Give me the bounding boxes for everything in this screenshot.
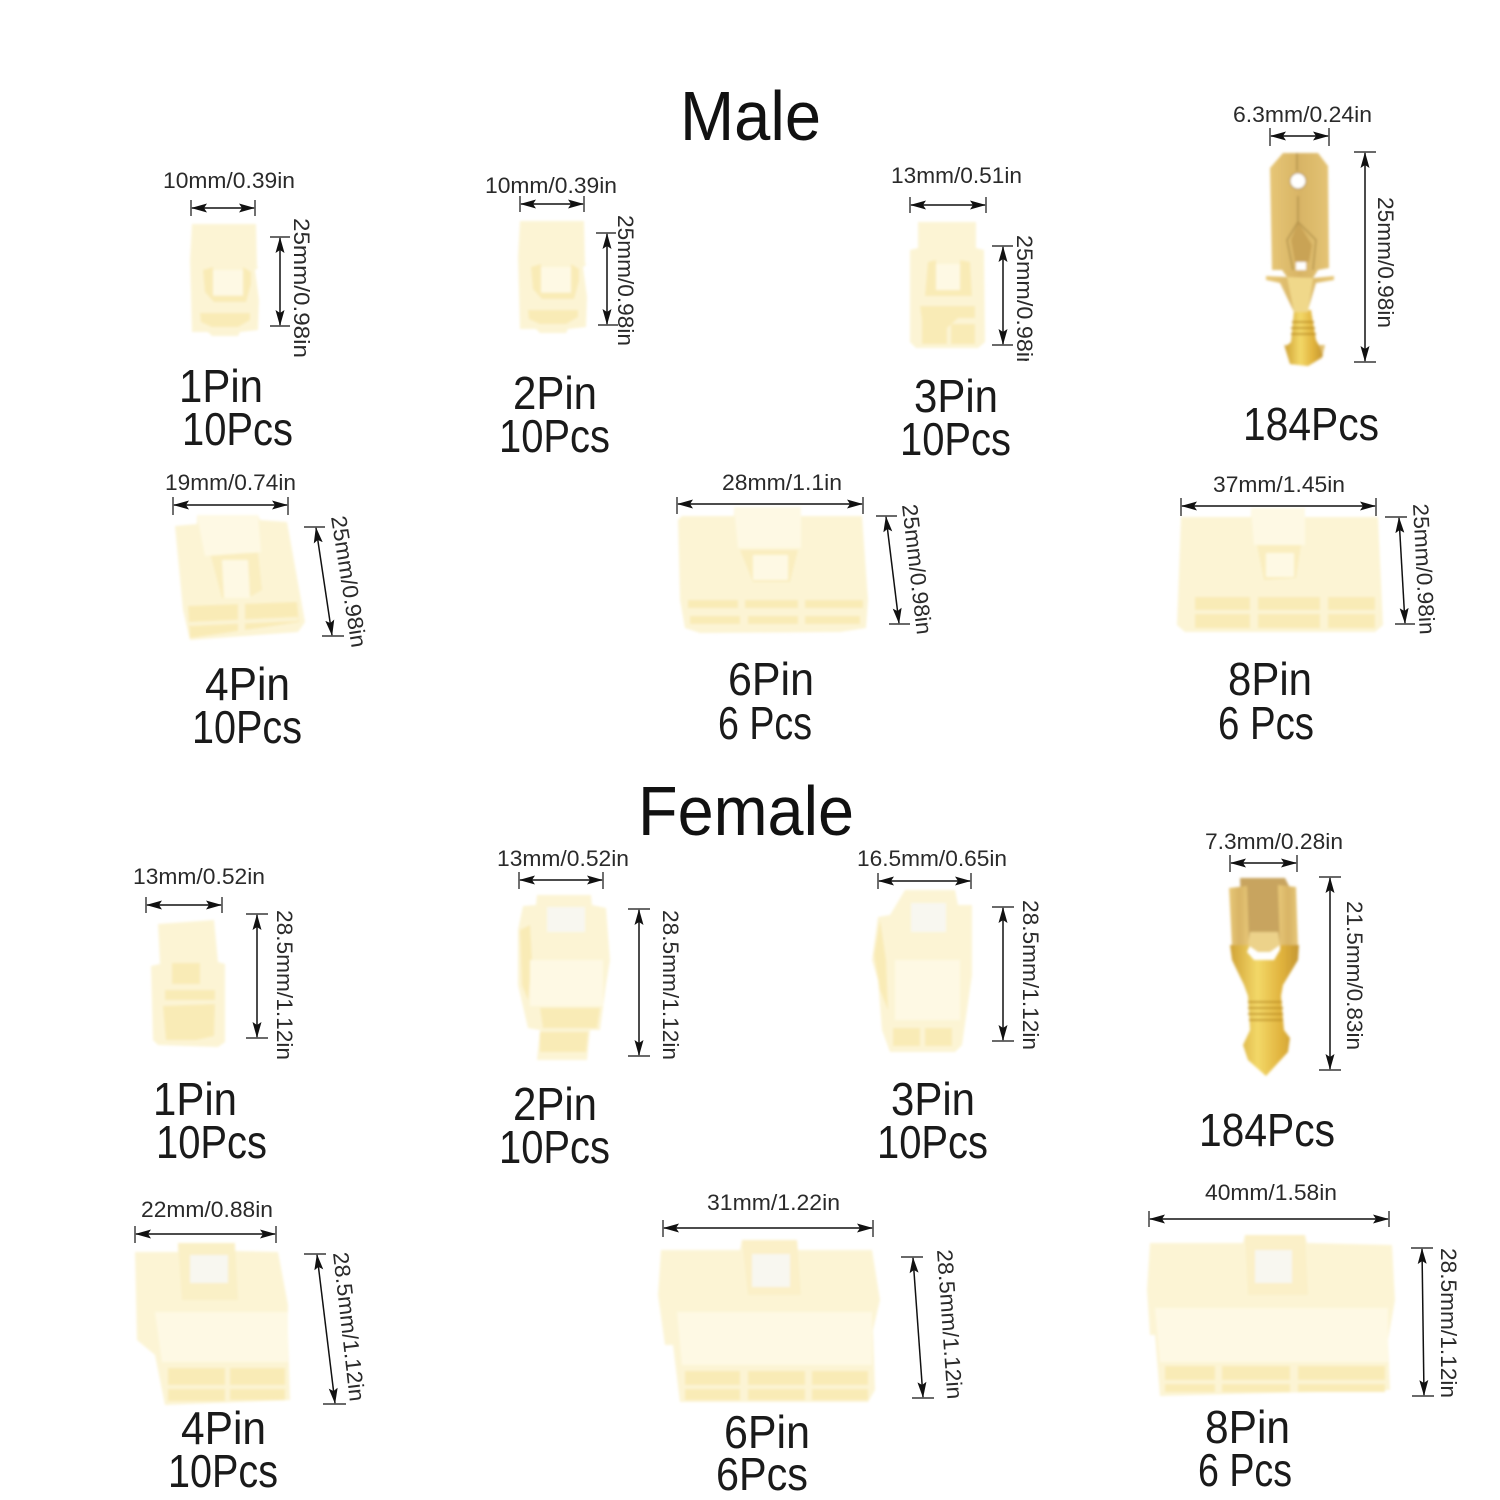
panel: male 2 pin [485,173,638,462]
label: 8Pin 6Pcs: 8Pin [1228,653,1312,705]
dimension: height 21.5mm [1319,877,1367,1070]
label: 1Pin 10Pcs: 1Pin [179,360,263,412]
dimension: width 13mm: 13mm/0.52in [133,864,265,889]
panel: male 6 pin [677,470,937,749]
connector: male 1 pin [190,224,259,336]
label: 6Pin 6Pcs: 6Pin [728,653,814,705]
connector: female 3 pin [872,890,972,1052]
label: 6Pin 6Pcs: 6 Pcs [718,697,812,749]
dimension: height 28.5mm [246,910,297,1060]
label: 4Pin 10Pcs: 10Pcs [192,701,302,753]
label: 3Pin 10Pcs: 10Pcs [877,1116,988,1168]
dimension: height 25mm [876,503,937,636]
dimension: height 25mm: 25mm/0.98in [897,503,937,636]
panel: male 1 pin [163,168,314,455]
label: 8Pin 6Pcs: 6 Pcs [1198,1444,1292,1496]
dimension: height 25mm [596,215,638,346]
label: 3Pin 10Pcs: 10Pcs [900,413,1011,465]
label: 4Pin 10Pcs: 4Pin [181,1402,266,1454]
connector: female 2 pin [518,895,610,1060]
dimension: width 10mm: 10mm/0.39in [163,168,295,193]
icon: male brass terminal [1266,153,1334,366]
connector: male 2 pin [518,221,587,333]
dimension: height 25mm [270,219,310,356]
dimension: height 25mm: 25mm/0.98in [1373,197,1398,328]
label: 2Pin 10Pcs [499,367,610,462]
connector: female 4 pin [135,1243,290,1405]
label: 6Pin 6Pcs [716,1406,810,1500]
connector: male 3 pin [910,222,985,348]
dimension: height 25mm [992,236,1033,361]
dimension: height 25mm: 25mm/0.98in [1012,235,1037,370]
dimension: width 7.3mm [1205,829,1343,872]
dimension: width 13mm [497,846,629,889]
label: 6Pin 6Pcs: 6Pcs [716,1448,808,1500]
panel: female 3 pin [857,846,1043,1168]
dimension: height 28.5mm [1411,1248,1461,1398]
connector: female 1 pin [151,920,225,1047]
label: 4Pin 10Pcs [168,1402,278,1497]
heading: Male: Male [680,77,821,155]
dimension: width 31mm: 31mm/1.22in [707,1190,840,1215]
dimension: width 37mm: 37mm/1.45in [1213,472,1345,497]
label: 3Pin 10Pcs [900,370,1011,465]
dimension: width 7.3mm: 7.3mm/0.28in [1205,829,1343,854]
label: 2Pin 10Pcs: 2Pin [513,1078,597,1130]
dimension: height 28.5mm [992,900,1043,1050]
label: 6Pin 6Pcs: 6Pin [724,1406,810,1458]
dimension: width 16.5mm: 16.5mm/0.65in [857,846,1007,871]
label: 1Pin 10Pcs: 10Pcs [182,403,293,455]
label: 1Pin 10Pcs [153,1073,267,1168]
dimension: height 25mm [1385,503,1440,635]
label: 3Pin 10Pcs [877,1073,988,1168]
panel: female 1 pin [133,864,297,1168]
dimension: width 6.3mm: 6.3mm/0.24in [1233,102,1372,127]
label: 6Pin 6Pcs [718,653,814,749]
panel: female 6 pin [658,1190,967,1500]
heading: Female: Female [638,772,854,850]
label: 2Pin 10Pcs: 10Pcs [499,410,610,462]
dimension: width 13mm [133,864,265,913]
panel: female 8 pin [1147,1180,1461,1496]
connector: male 8 pin [1177,508,1383,632]
label: 4Pin 10Pcs: 4Pin [205,658,290,710]
dimension: width 31mm [663,1190,873,1237]
label: 184Pcs: 184Pcs [1243,398,1379,450]
label: 8Pin 6Pcs [1198,1401,1292,1496]
dimension: height 25mm: 25mm/0.98in [1408,503,1440,635]
panel: male 3 pin [891,163,1037,465]
panel: male terminal [1233,102,1398,450]
connector: female 8 pin [1147,1235,1395,1396]
dimension: height 28.5mm: 28.5mm/1.12in [328,1251,370,1403]
dimension: height 25mm: 25mm/0.98in [289,218,314,358]
dimension: height 28.5mm: 28.5mm/1.12in [932,1249,967,1400]
dimension: width 13mm [891,163,1022,213]
panel: female 2 pin [497,846,683,1173]
dimension: width 40mm: 40mm/1.58in [1205,1180,1337,1205]
dimension: width 40mm [1149,1180,1389,1227]
label: 8Pin 6Pcs: 6 Pcs [1218,697,1314,749]
dimension: width 28mm [677,470,863,514]
panel: female terminal [1199,829,1367,1156]
dimension: height 28.5mm [901,1249,967,1400]
dimension: height 28.5mm: 28.5mm/1.12in [1018,900,1043,1050]
label: 1Pin 10Pcs: 10Pcs [156,1116,267,1168]
panel: male 4 pin [165,470,372,753]
label: 3Pin 10Pcs: 3Pin [891,1073,975,1125]
label: 4Pin 10Pcs [192,658,302,753]
dimension: width 19mm [165,470,296,515]
dimension: height 28.5mm [304,1251,370,1404]
label: 2Pin 10Pcs [499,1078,610,1173]
dimension: width 16.5mm [857,846,1007,889]
dimension: width 22mm: 22mm/0.88in [141,1197,273,1222]
dimension: height 28.5mm [628,909,683,1060]
dimension: width 22mm [135,1197,276,1243]
label: 2Pin 10Pcs: 10Pcs [499,1121,610,1173]
label: 8Pin 6Pcs [1218,653,1314,749]
label: 1Pin 10Pcs [179,360,293,455]
label: 4Pin 10Pcs: 10Pcs [168,1445,278,1497]
connector: male 6 pin [678,507,868,633]
dimension: height 25mm: 25mm/0.98in [326,514,372,649]
dimension: height 21.5mm: 21.5mm/0.83in [1342,901,1367,1050]
label: 2Pin 10Pcs: 2Pin [513,367,597,419]
icon: female brass terminal [1229,878,1299,1076]
dimension: height 28.5mm: 28.5mm/1.12in [272,910,297,1060]
label: 8Pin 6Pcs: 8Pin [1205,1401,1290,1453]
dimension: width 6.3mm [1233,102,1372,146]
panel: female 4 pin [135,1197,370,1497]
dimension: height 28.5mm: 28.5mm/1.12in [658,910,683,1060]
dimension: height 25mm [1354,152,1398,362]
dimension: width 13mm: 13mm/0.52in [497,846,629,871]
panel: male 8 pin [1177,472,1440,749]
dimension: height 25mm: 25mm/0.98in [613,215,638,346]
connector: male 4 pin [175,515,305,640]
dimension: height 25mm [304,514,372,649]
dimension: width 19mm: 19mm/0.74in [165,470,296,495]
dimension: width 10mm [163,168,295,216]
dimension: height 28.5mm: 28.5mm/1.12in [1436,1248,1461,1398]
dimension: width 28mm: 28mm/1.1in [722,470,842,495]
dimension: width 13mm: 13mm/0.51in [891,163,1022,188]
dimension: width 10mm [485,173,617,212]
dimension: width 37mm [1181,472,1376,516]
connector: female 6 pin [658,1240,880,1402]
label: 1Pin 10Pcs: 1Pin [153,1073,237,1125]
dimension: width 10mm: 10mm/0.39in [485,173,617,198]
label: 184Pcs: 184Pcs [1199,1104,1335,1156]
label: 3Pin 10Pcs: 3Pin [914,370,998,422]
